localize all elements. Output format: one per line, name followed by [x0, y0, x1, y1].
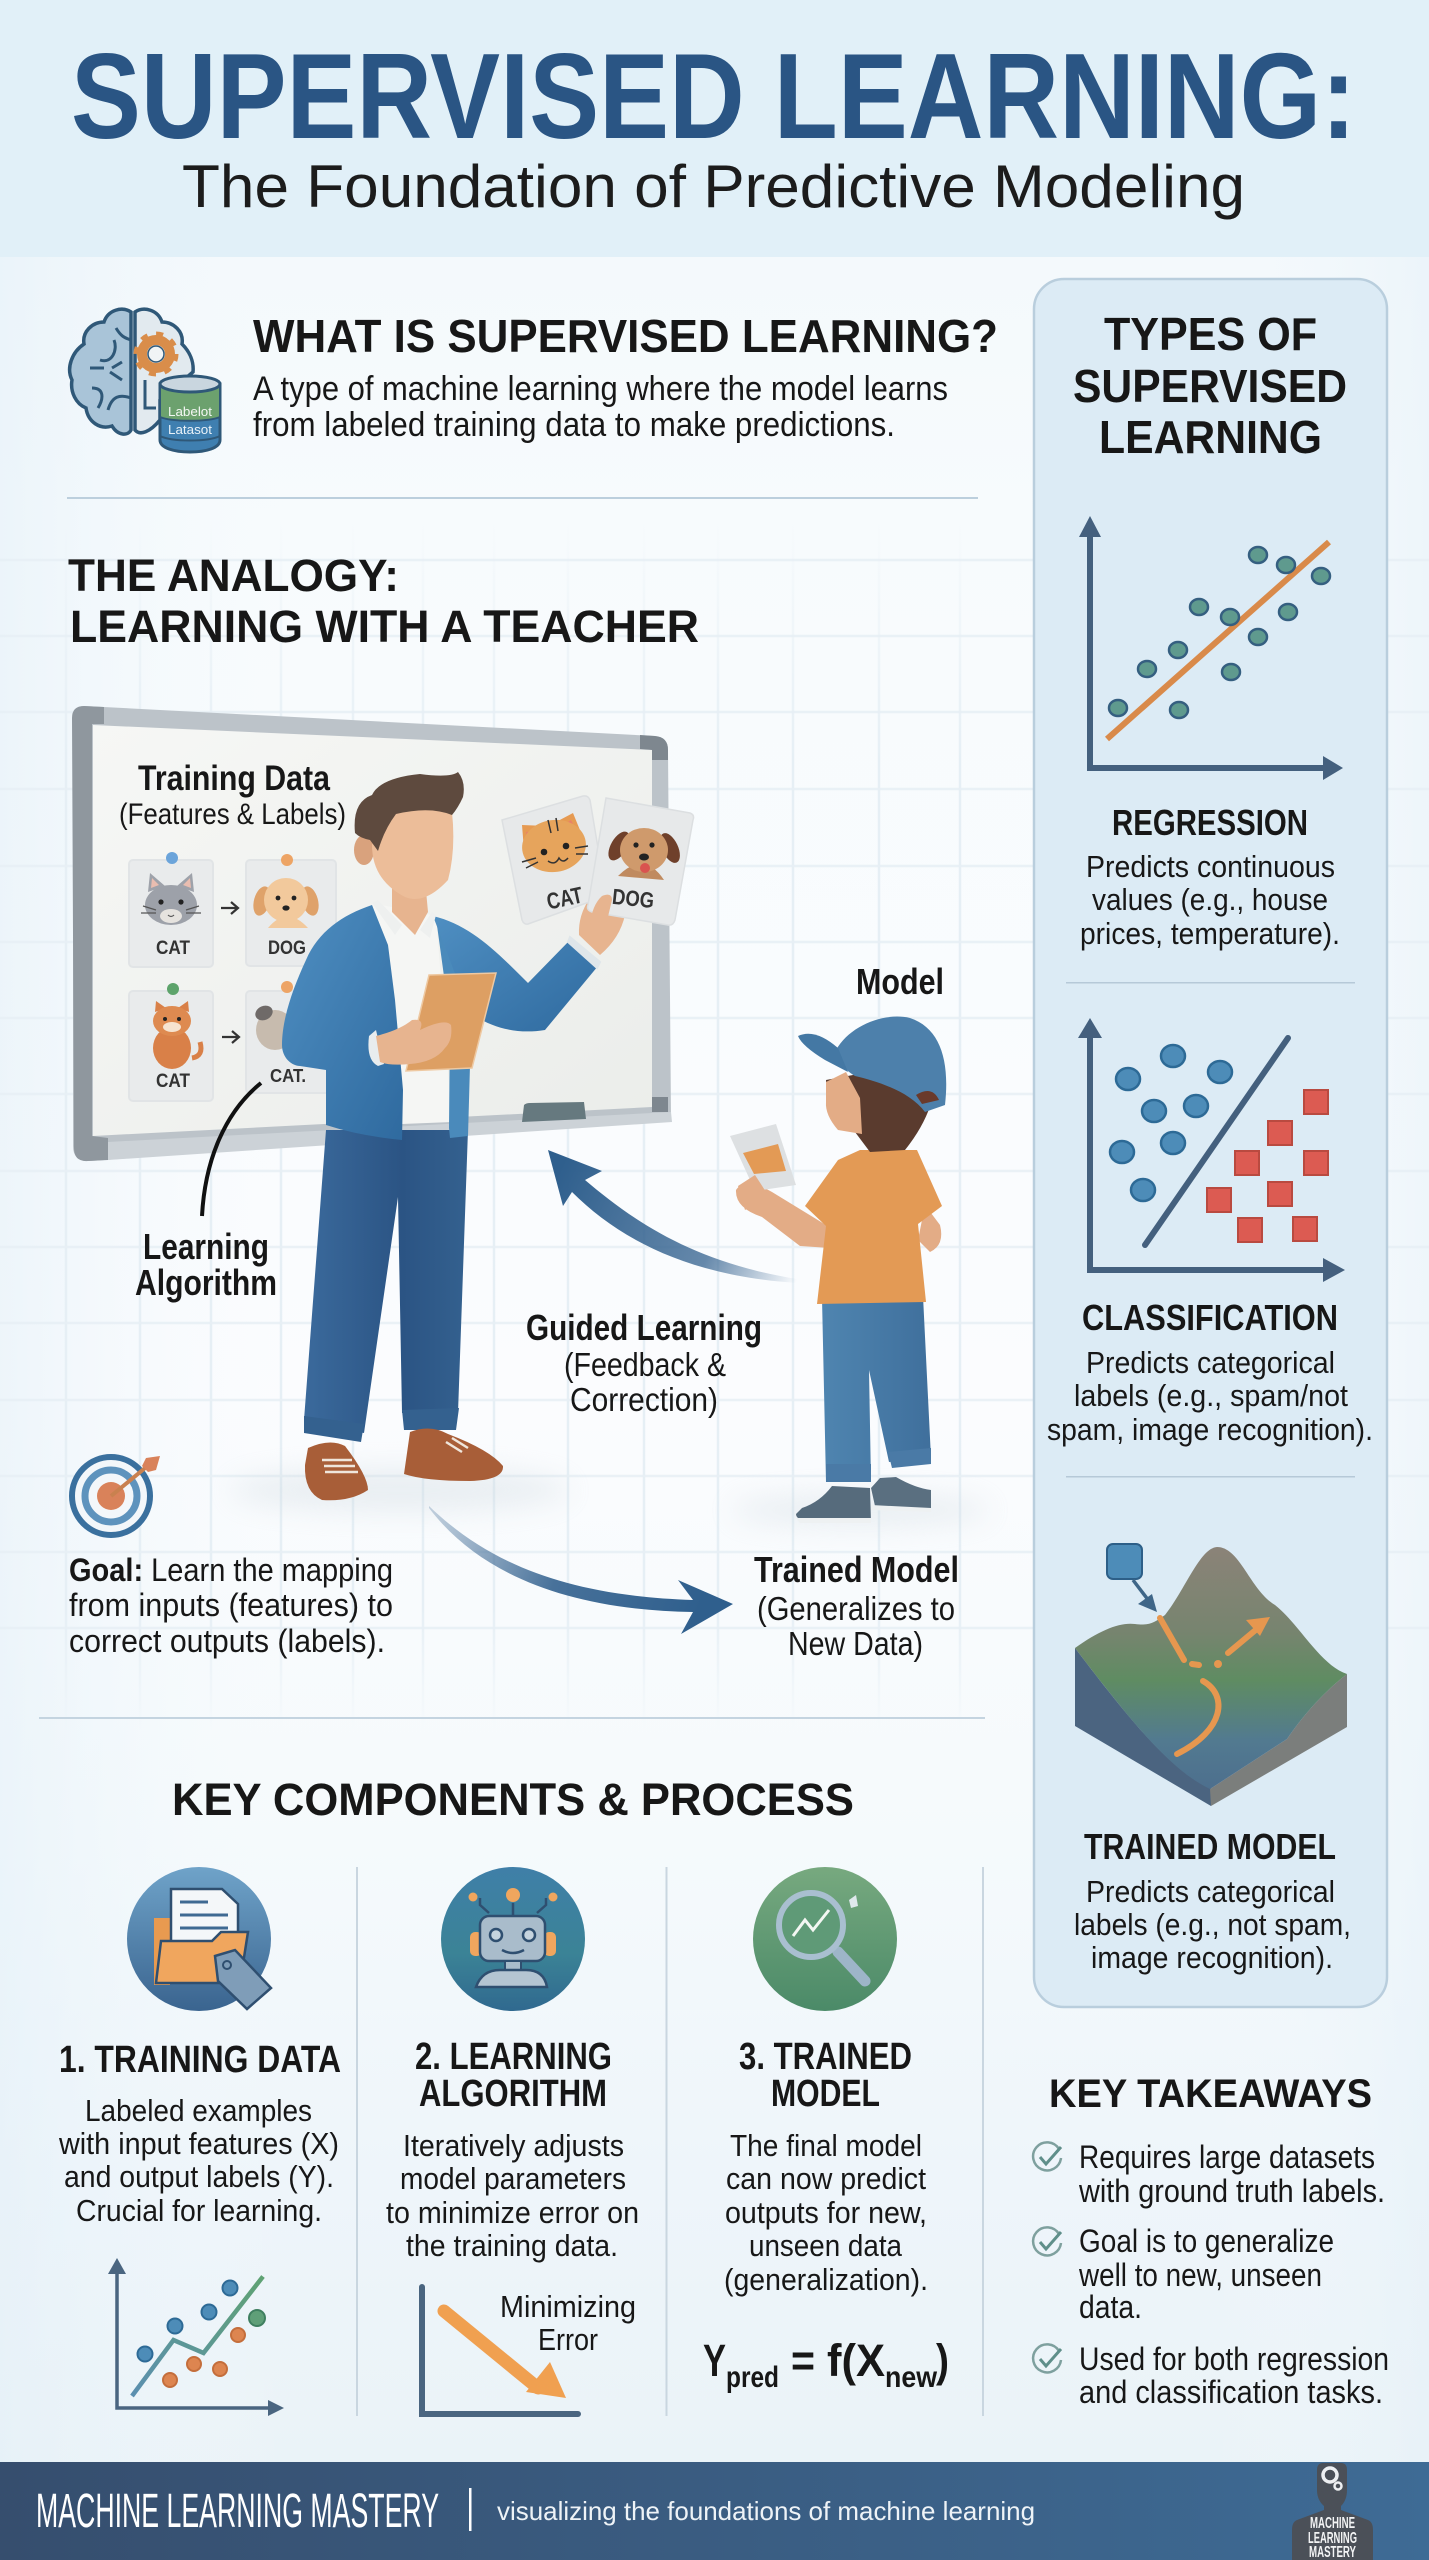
- cap: [836, 1017, 946, 1112]
- card: orange cat: CAT: [156, 1071, 190, 1092]
- trained model text: [1074, 1826, 1351, 1975]
- eraser: [522, 1102, 586, 1122]
- card: dog: DOG: [268, 938, 306, 959]
- text: goal: from inputs (features) to: [69, 1587, 393, 1623]
- pants: [822, 1296, 931, 1482]
- heading: 3. TRAINED: [739, 2036, 912, 2078]
- regression text: [1080, 802, 1340, 951]
- heading: the analogy: LEARNING WITH A TEACHER: [70, 601, 699, 652]
- classification text: labels (e.g., spam/not: [1074, 1378, 1348, 1413]
- formula: pred: [726, 2361, 779, 2394]
- far arm: [918, 1205, 941, 1252]
- text block: definition: from labeled training data to make predictions.: [253, 406, 895, 444]
- label: guided learning: Correction): [570, 1381, 718, 1418]
- takeaway 1: [1033, 2139, 1385, 2209]
- footer bar: [0, 2462, 1429, 2560]
- ear: [354, 835, 374, 865]
- takeaway 1: Requires large datasets: [1079, 2139, 1375, 2175]
- label: guided learning: [526, 1307, 762, 1418]
- left cuff and holding hand: [368, 1030, 384, 1066]
- label: training data: (Features & Labels): [119, 798, 346, 831]
- panel: key takeaways: [1033, 2072, 1389, 2410]
- takeaway 3: Used for both regression: [1079, 2341, 1389, 2377]
- formula: new: [885, 2361, 938, 2394]
- classification text: spam, image recognition).: [1047, 1412, 1373, 1447]
- raised thumb over cards: [590, 895, 612, 925]
- body: the training data.: [406, 2228, 618, 2263]
- takeaway 2: well to new, unseen: [1078, 2257, 1322, 2293]
- header band: [0, 0, 1429, 257]
- error chart: [422, 2287, 636, 2414]
- body: Crucial for learning.: [76, 2193, 322, 2228]
- heading: KEY TAKEAWAYS: [1049, 2072, 1372, 2116]
- shirt: [805, 1150, 942, 1304]
- regression text: values (e.g., house: [1092, 882, 1328, 917]
- label: trained model: (Generalizes to: [757, 1590, 955, 1627]
- label: training data: [119, 759, 346, 831]
- regression text: Predicts continuous: [1086, 849, 1335, 884]
- logo: head with gears: LEARNING: [1308, 2530, 1357, 2547]
- body: [386, 2128, 639, 2263]
- label: trained model: New Data): [788, 1625, 923, 1662]
- formula: f(X: [827, 2335, 885, 2386]
- classification text: Predicts categorical: [1086, 1345, 1335, 1380]
- body: Iteratively adjusts: [403, 2128, 624, 2163]
- left jacket and sleeve: [282, 905, 403, 1140]
- pants: [304, 1130, 468, 1433]
- classification chart: [1078, 1018, 1345, 1282]
- collar: [372, 900, 436, 938]
- heading: the analogy: THE ANALOGY:: [68, 550, 399, 601]
- takeaway 3: [1033, 2341, 1389, 2410]
- scatter chart: [108, 2258, 284, 2416]
- heading: [739, 2036, 912, 2115]
- takeaway 2: data.: [1079, 2289, 1142, 2325]
- shirt: [372, 903, 452, 1124]
- body: to minimize error on: [386, 2195, 639, 2230]
- heading: key components and process: KEY COMPONENTS & PROCESS: [172, 1774, 854, 1825]
- right jacket: [436, 918, 471, 1138]
- icon: robot: [441, 1867, 585, 2011]
- panel heading: [1073, 308, 1347, 463]
- heading: 2. LEARNING: [415, 2036, 612, 2078]
- label: trained model: [754, 1549, 959, 1662]
- held card: cat: CAT: [544, 882, 585, 915]
- icon: folder with tag: [127, 1867, 271, 2011]
- regression chart: [1079, 516, 1343, 780]
- label: learning algorithm: [135, 1226, 277, 1303]
- panel heading: SUPERVISED: [1073, 360, 1347, 412]
- brand name: MACHINE LEARNING MASTERY: [36, 2485, 439, 2538]
- near arm: [736, 1183, 830, 1248]
- arrow: cat to dog row one: [221, 902, 238, 914]
- card: partly hidden dog: CAT.: [270, 1066, 306, 1086]
- held fingers: [738, 1175, 768, 1210]
- arrow: guided learning feedback: [548, 1150, 797, 1283]
- logo: head with gears: MACHINE: [1310, 2515, 1355, 2532]
- takeaway 1: with ground truth labels.: [1078, 2173, 1385, 2209]
- column 2: learning algorithm: [386, 1867, 639, 2414]
- card: gray cat: CAT: [156, 938, 190, 959]
- label: model: Model: [856, 961, 944, 1002]
- icon: target with arrow: [72, 1456, 160, 1535]
- icon: brain and labeled database: Latasot: [168, 422, 212, 437]
- teacher figure: [282, 772, 625, 1500]
- takeaway 2: [1033, 2223, 1334, 2325]
- neck: [392, 880, 428, 935]
- takeaway 3: and classification tasks.: [1079, 2374, 1383, 2410]
- arrow: towards trained model: [429, 1506, 733, 1634]
- body: and output labels (Y).: [64, 2159, 334, 2194]
- text block: definition: A type of machine learning where the model learns: [253, 370, 948, 408]
- trained model text: image recognition).: [1091, 1940, 1333, 1975]
- column 3: trained model: [703, 1867, 949, 2394]
- heading: MODEL: [771, 2073, 880, 2115]
- formula: =: [791, 2335, 815, 2386]
- body: with input features (X): [58, 2126, 339, 2161]
- error chart: Minimizing: [500, 2289, 636, 2324]
- floor shadows: [230, 1468, 990, 1526]
- body: Labeled examples: [85, 2093, 312, 2128]
- regression text: prices, temperature).: [1080, 916, 1340, 951]
- column 1: training data: [58, 1867, 341, 2416]
- right sleeve: [433, 916, 598, 1031]
- arrow: cat to dog row two: [222, 1031, 239, 1043]
- body: can now predict: [726, 2161, 926, 2196]
- heading: what is supervised learning: WHAT IS SUPERVISED LEARNING?: [253, 310, 998, 362]
- raised hand: [579, 892, 625, 955]
- icon: brain and labeled database: Labelot: [168, 404, 212, 419]
- held card: dog: [588, 798, 694, 925]
- label: guided learning: Guided Learning: [526, 1307, 762, 1348]
- formula: Y: [703, 2335, 726, 2386]
- body: [724, 2128, 928, 2297]
- body: The final model: [730, 2128, 922, 2163]
- shoes: [796, 1486, 871, 1522]
- text: goal: Goal: Learn the mapping: [69, 1552, 393, 1588]
- label: guided learning: (Feedback &: [564, 1346, 726, 1383]
- logo: head with gears: [1292, 2463, 1373, 2560]
- label: trained model: Trained Model: [754, 1549, 959, 1590]
- shoes: [305, 1442, 368, 1500]
- tablet: [406, 973, 496, 1071]
- icon: magnifier: [753, 1867, 897, 2011]
- panel: types of supervised learning: [1034, 279, 1387, 2007]
- body: model parameters: [400, 2161, 626, 2196]
- label: training data: Training Data: [138, 759, 330, 798]
- body: outputs for new,: [725, 2195, 927, 2230]
- label: learning algorithm: Algorithm: [135, 1262, 277, 1303]
- heading: the analogy: [68, 550, 699, 652]
- error chart: Error: [538, 2322, 598, 2357]
- icon: brain and labeled database: [70, 309, 220, 452]
- regression text: REGRESSION: [1112, 802, 1308, 843]
- student figure: [730, 1017, 946, 1523]
- text: goal: [69, 1552, 393, 1659]
- held card: [730, 1124, 796, 1191]
- heading: [415, 2036, 612, 2115]
- trained model text: Predicts categorical: [1086, 1874, 1335, 1909]
- face: [372, 809, 453, 899]
- subtitle: The Foundation of Predictive Modeling: [182, 153, 1245, 220]
- body: [58, 2093, 339, 2228]
- whiteboard with training data: [72, 706, 672, 1161]
- tagline: visualizing the foundations of machine learning: [497, 2496, 1035, 2526]
- card: partly hidden dog: [246, 981, 336, 1093]
- text block: definition: [253, 370, 948, 444]
- head: [826, 1070, 932, 1152]
- card: gray cat: [129, 852, 213, 967]
- formula: ): [936, 2335, 949, 2386]
- heading: 1. TRAINING DATA: [59, 2039, 341, 2081]
- formula: [703, 2335, 949, 2394]
- card: dog: [246, 854, 336, 966]
- trained model text: TRAINED MODEL: [1084, 1826, 1336, 1867]
- classification text: [1047, 1297, 1373, 1447]
- body: unseen data: [749, 2228, 903, 2263]
- card: orange cat: [129, 983, 213, 1101]
- held card: dog: DOG: [611, 884, 655, 913]
- label: learning algorithm: Learning: [143, 1226, 269, 1267]
- terrain loss landscape icon: [1075, 1544, 1347, 1806]
- takeaway 2: Goal is to generalize: [1079, 2223, 1334, 2259]
- hair: [355, 772, 464, 851]
- held card: cat: [502, 796, 606, 924]
- text: goal: correct outputs (labels).: [69, 1623, 385, 1659]
- leader line: learning algorithm: [202, 1083, 261, 1216]
- panel heading: LEARNING: [1099, 411, 1322, 463]
- panel heading: TYPES OF: [1104, 308, 1317, 360]
- heading: ALGORITHM: [419, 2073, 607, 2115]
- body: (generalization).: [724, 2262, 928, 2297]
- classification text: CLASSIFICATION: [1082, 1297, 1338, 1338]
- trained model text: labels (e.g., not spam,: [1074, 1907, 1351, 1942]
